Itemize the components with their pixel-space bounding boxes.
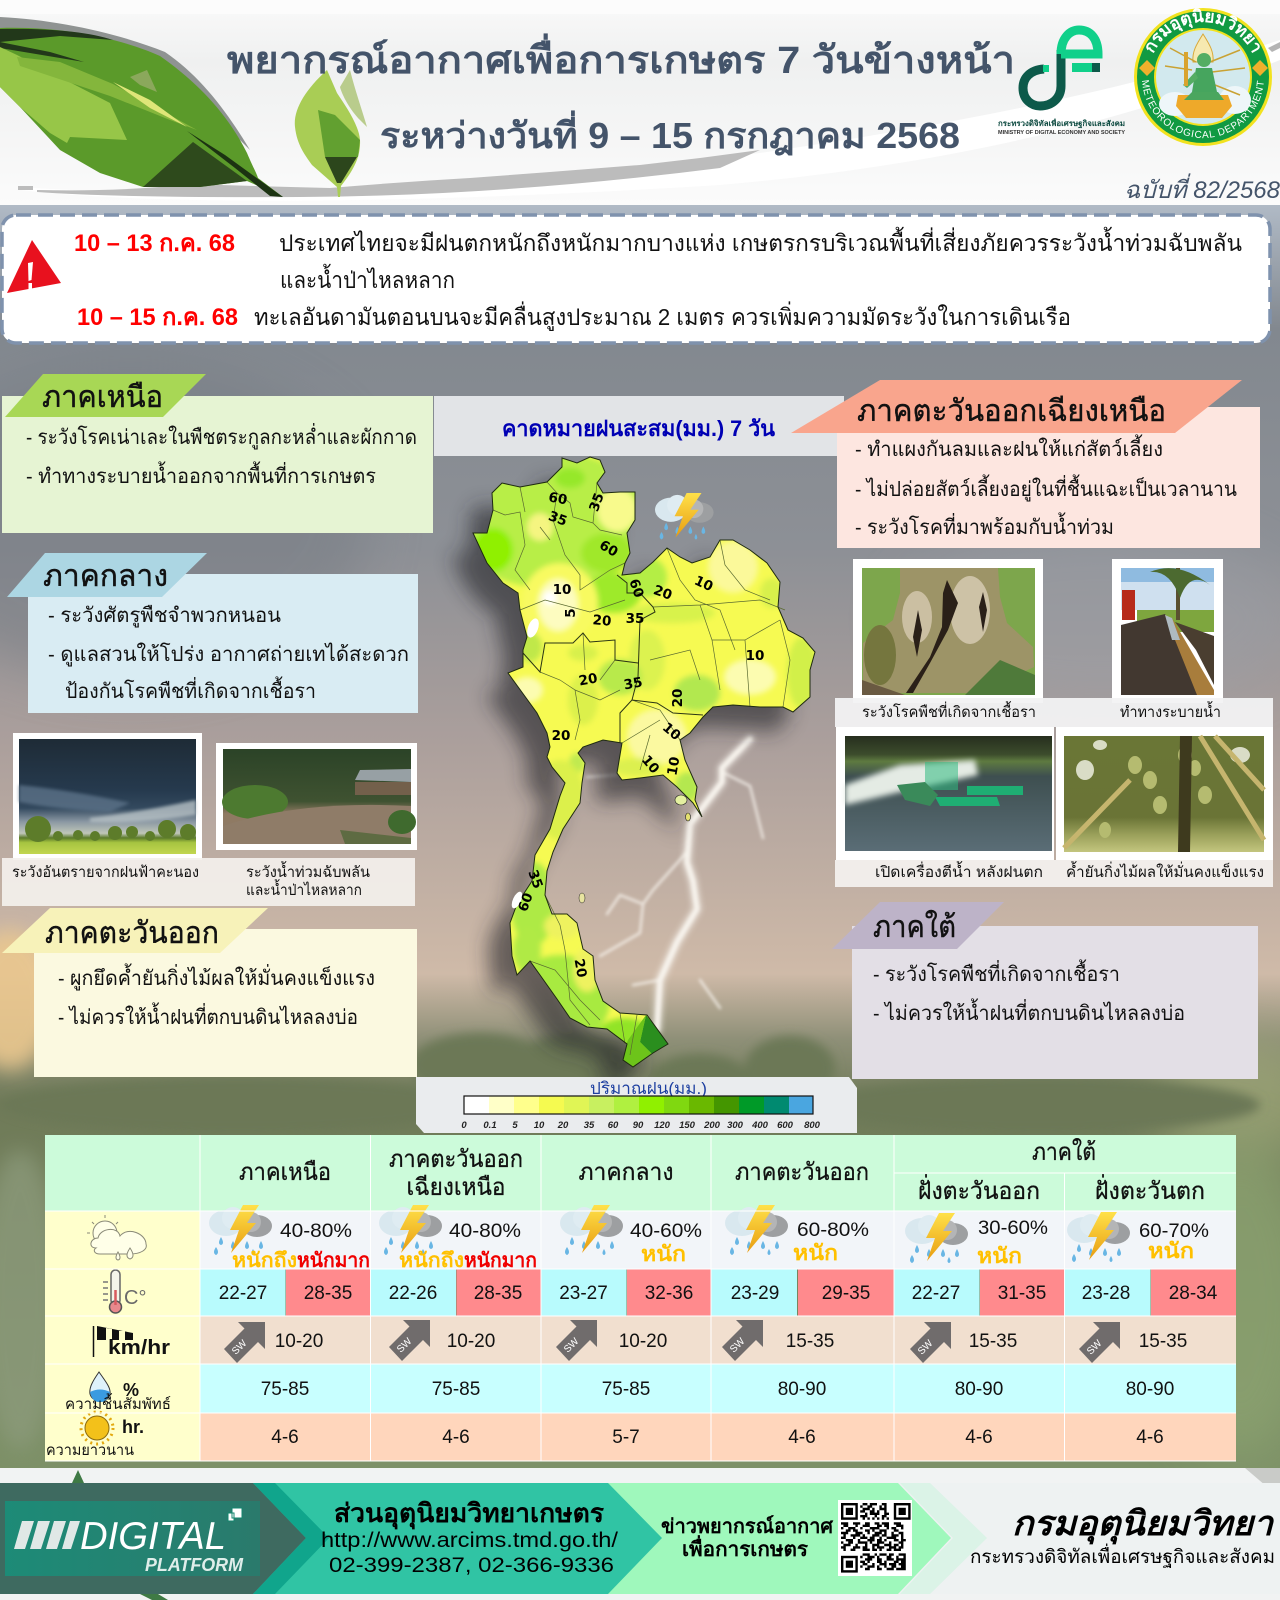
temperature row: 31-35 [998, 1283, 1046, 1304]
humidity row: 75-85 [432, 1379, 480, 1400]
wind arrow: south west coast: SW [1085, 1338, 1105, 1357]
rain cell: northeast: หนักมาก [464, 1250, 537, 1272]
warning text 2: ทะเลอันดามันตอนบนจะมีคลื่นสูงประมาณ 2 เมตร ควรเพิ่มความมัดระวังในการเดินเรือ [254, 301, 1071, 331]
wind speeds: 15-35 [1139, 1331, 1187, 1352]
digital platform badge [5, 1501, 260, 1576]
department name: กรมอุตุนิยมวิทยา [1012, 1505, 1275, 1545]
icon: sunshine: ความยาวนาน [46, 1442, 134, 1459]
map rainfall labels: 10 [659, 720, 684, 744]
panel: central [7, 553, 418, 713]
temperature row: 29-35 [822, 1283, 870, 1304]
sunshine row: 4-6 [442, 1427, 470, 1448]
map rainfall labels: 5 [563, 608, 579, 618]
north advice: - ระวังโรคเน่าเละในพืชตระกูลกะหล่ำและผักกาด [26, 423, 417, 450]
heading tab [2, 908, 268, 953]
colour scale [464, 1096, 813, 1114]
icon: sunshine: hr. [122, 1417, 144, 1437]
legend values: 300 [727, 1120, 744, 1131]
logo: digital economy ministry: กระทรวงดิจิทัลเพื่อเศรษฐกิจและสังคม [998, 117, 1125, 129]
footer band [0, 1468, 1280, 1600]
rain cell: northeast [379, 1205, 537, 1272]
map rainfall labels: 35 [623, 674, 644, 693]
warning text 1 continued: และน้ำป่าไหลหลาก [280, 264, 455, 293]
heading tab: ภาคกลาง [43, 560, 168, 593]
map rainfall labels: 20 [592, 612, 612, 630]
map rainfall labels: 10 [553, 582, 571, 598]
icon: sunshine [46, 1412, 144, 1459]
map rainfall labels: 35 [524, 868, 546, 891]
rain cell: central: 40-60% [630, 1221, 702, 1242]
rain cell: south east coast [905, 1213, 1048, 1268]
map rainfall labels: 10 [638, 752, 662, 777]
logo: meteorological department seal [1134, 8, 1272, 146]
legend values: 35 [584, 1120, 595, 1131]
caption bar: left photos: ระวังน้ำท่วมฉับพลัน [246, 861, 370, 881]
rain cell: east [725, 1205, 869, 1265]
wind arrow: north: SW [230, 1338, 250, 1357]
legend values [461, 1120, 821, 1131]
icon: humidity drop: % [123, 1380, 139, 1400]
icon: wind sock with unit: km/hr [108, 1337, 170, 1359]
legend values: 200 [703, 1120, 721, 1131]
humidity row: 80-90 [955, 1379, 1003, 1400]
icon: humidity drop: ความชื้นสัมพัทธ์ [65, 1393, 171, 1413]
rain cell: north: หนักมาก [297, 1250, 370, 1272]
rain cell: central [560, 1205, 702, 1266]
icon: wind sock with unit [94, 1326, 170, 1359]
rain cell: south east coast: หนัก [977, 1245, 1022, 1268]
central advice [48, 604, 409, 703]
legend values: 600 [777, 1120, 794, 1131]
title: พยากรณ์อากาศเพื่อการเกษตร 7 วันข้างหน้า [227, 33, 1015, 82]
sunshine row [200, 1413, 1236, 1461]
temperature row: 22-27 [912, 1283, 960, 1304]
table header row: ภาคใต้ [1032, 1138, 1096, 1166]
table header row: ภาคเหนือ [239, 1159, 331, 1186]
caption bar: left photos: ระวังอันตรายจากฝนฟ้าคะนอง [12, 864, 199, 881]
legend values: 800 [804, 1120, 821, 1131]
rain cell: south west coast [1067, 1212, 1209, 1263]
south advice: - ไม่ควรให้น้ำฝนที่ตกบนดินไหลลงบ่อ [873, 998, 1185, 1025]
wind arrow: east: SW [728, 1336, 748, 1355]
table header row: ฝั่งตะวันตก [1095, 1174, 1205, 1205]
panel: northeast [791, 380, 1260, 548]
edition number: ฉบับที่ 82/2568 [1124, 173, 1280, 204]
wind arrow: south east coast: SW [916, 1338, 936, 1357]
legend values: 120 [654, 1120, 671, 1131]
agrometeorology contact [321, 1498, 618, 1577]
sunshine row: 4-6 [788, 1427, 816, 1448]
map rainfall labels: 20 [670, 689, 686, 707]
northeast advice: - ระวังโรคที่มาพร้อมกับน้ำท่วม [855, 512, 1114, 539]
panel: north [2, 374, 433, 533]
logo: digital economy ministry [998, 30, 1125, 136]
icon: humidity drop [65, 1372, 171, 1413]
QR code [838, 1500, 912, 1576]
news label: ข่าวพยากรณ์อากาศ [661, 1515, 834, 1538]
heading tab: ภาคใต้ [873, 910, 956, 944]
heading tab [7, 553, 207, 597]
rain cell: central: หนัก [641, 1243, 686, 1266]
caption bar: left photos: และน้ำป่าไหลหลาก [246, 879, 362, 899]
wind arrow: central [556, 1320, 597, 1361]
wind arrow: central: SW [562, 1336, 582, 1355]
map rainfall labels: 10 [746, 648, 764, 664]
icon: thermometer [103, 1270, 146, 1313]
legend values: 5 [512, 1120, 518, 1131]
humidity row [200, 1364, 1236, 1413]
photo: drainage ditch [1112, 559, 1223, 703]
wind arrow: north [224, 1322, 265, 1363]
wind arrow: east [722, 1320, 763, 1361]
temperature row: 28-35 [474, 1283, 522, 1304]
map rainfall labels: 10 [664, 756, 683, 777]
humidity row: 80-90 [1126, 1379, 1174, 1400]
icon: warning triangle [7, 240, 61, 293]
wind speeds: 15-35 [786, 1331, 834, 1352]
legend values: 0 [461, 1120, 467, 1131]
icon: lightning behind map [587, 739, 763, 1030]
photo: durian support poles [1056, 727, 1273, 860]
caption bar: right photos bottom: ค้ำยันกิ่งไม้ผลให้มั่นคงแข็งแรง [1066, 861, 1264, 881]
map rainfall labels: 20 [552, 728, 570, 744]
rain cell: north [209, 1205, 370, 1272]
caption bar: right photos top: ทำทางระบายน้ำ [1120, 701, 1221, 721]
wind speeds: 10-20 [447, 1331, 495, 1352]
panel: map title [434, 396, 844, 456]
panel: east [2, 908, 417, 1077]
wind speeds: 10-20 [619, 1331, 667, 1352]
panel: south [832, 902, 1258, 1079]
northeast advice: - ทำแผงกันลมและฝนให้แก่สัตว์เลี้ยง [855, 434, 1163, 461]
wind arrow: northeast: SW [395, 1336, 415, 1355]
warning dates 2: 10 – 15 ก.ค. 68 [77, 304, 238, 331]
wind speeds: 10-20 [275, 1331, 323, 1352]
caption bar: right photos bottom [835, 860, 1273, 887]
subtitle date range: ระหว่างวันที่ 9 – 15 กรกฎาคม 2568 [380, 110, 960, 156]
temperature row: 23-29 [731, 1283, 779, 1304]
legend values: 10 [534, 1120, 545, 1131]
table header row: เฉียงเหนือ [406, 1174, 506, 1201]
heading tab [5, 374, 206, 417]
legend values: 0.1 [483, 1120, 497, 1131]
rain row [200, 1205, 1236, 1272]
east advice: - ไม่ควรให้น้ำฝนที่ตกบนดินไหลลงบ่อ [58, 1002, 358, 1029]
table header row: ภาคกลาง [578, 1159, 674, 1186]
caption bar: right photos top [835, 698, 1273, 727]
rain cell: south east coast: 30-60% [978, 1218, 1048, 1239]
agrometeorology contact: 02-399-2387, 02-366-9336 [329, 1554, 614, 1577]
caption bar: right photos bottom: เปิดเครื่องตีน้ำ หลังฝนตก [875, 861, 1043, 881]
humidity row: 75-85 [602, 1379, 650, 1400]
map rainfall labels: 20 [578, 670, 599, 689]
map islands and lake [510, 617, 690, 910]
photo: aerator in pond [836, 727, 1054, 860]
temperature row: 23-27 [559, 1283, 608, 1304]
map: forecast rainfall over Thailand [450, 450, 820, 1089]
south advice [873, 959, 1185, 1025]
icon: small green leaf [295, 70, 367, 197]
temperature row: 32-36 [645, 1283, 693, 1304]
icon: thunderstorm cloud over map [655, 493, 714, 540]
warning dates 1: 10 – 13 ก.ค. 68 [74, 230, 235, 257]
agrometeorology contact: ส่วนอุตุนิยมวิทยาเกษตร [334, 1498, 604, 1530]
heading tab: ภาคตะวันออกเฉียงเหนือ [857, 395, 1166, 428]
south advice: - ระวังโรคพืชที่เกิดจากเชื้อรา [873, 959, 1120, 986]
wind arrow: northeast [389, 1320, 430, 1361]
department name [970, 1505, 1275, 1568]
map rainfall labels: 20 [571, 958, 590, 979]
sunshine row: 4-6 [271, 1427, 299, 1448]
north advice: - ทำทางระบายน้ำออกจากพื้นที่การเกษตร [26, 461, 376, 488]
table header row: ภาคตะวันออก [389, 1146, 523, 1173]
sunshine row: 4-6 [1136, 1427, 1164, 1448]
agrometeorology contact: http://www.arcims.tmd.go.th/ [321, 1529, 618, 1552]
central advice: - ระวังศัตรูพืชจำพวกหนอน [48, 604, 281, 628]
map rainfall labels: 60 [596, 537, 621, 560]
temperature row: 28-35 [304, 1283, 352, 1304]
logo: meteorological department seal: METEOROLOGICAL DEPARTMENT [1142, 80, 1264, 138]
legend values: 150 [679, 1120, 696, 1131]
heading tab: ภาคเหนือ [42, 381, 163, 414]
rain cell: south west coast: 60-70% [1139, 1221, 1209, 1242]
icon: large green leaf [0, 17, 283, 197]
wind row [200, 1316, 1236, 1364]
panel: map title: คาดหมายฝนสะสม(มม.) 7 วัน [502, 416, 775, 441]
digital platform badge: DIGITAL [80, 1515, 226, 1558]
temperature row: 22-27 [219, 1283, 267, 1304]
panel: rainfall legend: ปริมาณฝน(มม.) [590, 1079, 707, 1098]
photo: tree trunk disease [853, 559, 1043, 703]
map rainfall labels: 60 [515, 891, 537, 914]
sunshine row: 5-7 [612, 1427, 640, 1448]
rain cell: north: 40-80% [280, 1221, 352, 1242]
caption bar: right photos top: ระวังโรคพืชที่เกิดจากเชื้อรา [862, 701, 1036, 721]
panel: rainfall legend [416, 1077, 857, 1133]
map rainfall labels: 60 [625, 577, 647, 600]
wind speeds: 15-35 [969, 1331, 1017, 1352]
map rainfall labels [515, 489, 764, 979]
wind speeds [275, 1331, 1187, 1352]
logo: digital economy ministry: MINISTRY OF DIGITAL ECONOMY AND SOCIETY [998, 130, 1125, 136]
news label: เพื่อการเกษตร [682, 1534, 808, 1561]
map rainfall labels: 35 [586, 491, 608, 514]
map rainfall labels: 10 [692, 573, 715, 595]
rain cell: east: 60-80% [797, 1220, 869, 1241]
table header row [45, 1135, 1236, 1211]
photo: flood [216, 743, 417, 850]
news label [661, 1515, 834, 1561]
sunshine row: 4-6 [965, 1427, 993, 1448]
northeast advice: - ไม่ปล่อยสัตว์เลี้ยงอยู่ในที่ชื้นแฉะเป็นเวลานาน [855, 474, 1237, 502]
warning text 1: ประเทศไทยจะมีฝนตกหนักถึงหนักมากบางแห่ง เกษตรกรบริเวณพื้นที่เสี่ยงภัยควรระวังน้ำท่วมฉับพลัน [279, 227, 1242, 256]
legend values: 90 [633, 1120, 644, 1131]
icon: sun and cloud [87, 1215, 146, 1260]
legend values: 60 [608, 1120, 619, 1131]
heading tab: ภาคตะวันออก [45, 917, 219, 950]
rain cell: northeast: 40-80% [449, 1221, 521, 1242]
heading tab [832, 902, 1004, 949]
row labels column [45, 1211, 200, 1461]
map rainfall labels: 60 [547, 489, 568, 508]
wind arrow: south west coast [1079, 1322, 1120, 1363]
temperature row [200, 1269, 1236, 1316]
icon: thermometer: C° [124, 1287, 146, 1309]
north advice [26, 423, 417, 488]
heading tab [791, 380, 1242, 433]
photo: storm clouds [13, 733, 202, 860]
rain cell: northeast: หนักถึง [399, 1250, 464, 1272]
temperature row: 23-28 [1082, 1283, 1130, 1304]
wind arrow: south east coast [910, 1322, 951, 1363]
panel: warning box [2, 215, 1270, 343]
footer chevrons [0, 1470, 1280, 1600]
department name: กระทรวงดิจิทัลเพื่อเศรษฐกิจและสังคม [970, 1543, 1275, 1568]
map rainfall labels: 35 [626, 611, 644, 627]
map rainfall labels: 20 [651, 582, 674, 604]
map rainfall labels: 35 [546, 508, 569, 530]
northeast advice [855, 434, 1237, 539]
legend values: 400 [751, 1120, 769, 1131]
central advice: - ดูแลสวนให้โปร่ง อากาศถ่ายเทได้สะดวก [48, 642, 409, 667]
temperature row: 28-34 [1169, 1283, 1218, 1304]
central advice: ป้องกันโรคพืชที่เกิดจากเชื้อรา [65, 676, 316, 703]
east advice [58, 963, 375, 1029]
rain cell: north: หนักถึง [232, 1250, 297, 1272]
table header row: ภาคตะวันออก [735, 1159, 869, 1186]
east advice: - ผูกยึดค้ำยันกิ่งไม้ผลให้มั่นคงแข็งแรง [58, 963, 375, 991]
humidity row: 80-90 [778, 1379, 826, 1400]
digital platform badge: PLATFORM [145, 1555, 244, 1575]
caption bar: left photos [2, 858, 415, 906]
table: regional forecast [45, 1135, 1236, 1461]
logo: meteorological department seal: กรมอุตุนิยมวิทยา [1146, 8, 1260, 53]
humidity row: 75-85 [261, 1379, 309, 1400]
legend values: 20 [557, 1120, 569, 1131]
table header row: ฝั่งตะวันออก [918, 1174, 1040, 1205]
rain cell: south west coast: หนัก [1148, 1240, 1194, 1263]
temperature row: 22-26 [389, 1283, 437, 1304]
header band [0, 0, 1280, 205]
rain cell: east: หนัก [793, 1242, 838, 1265]
